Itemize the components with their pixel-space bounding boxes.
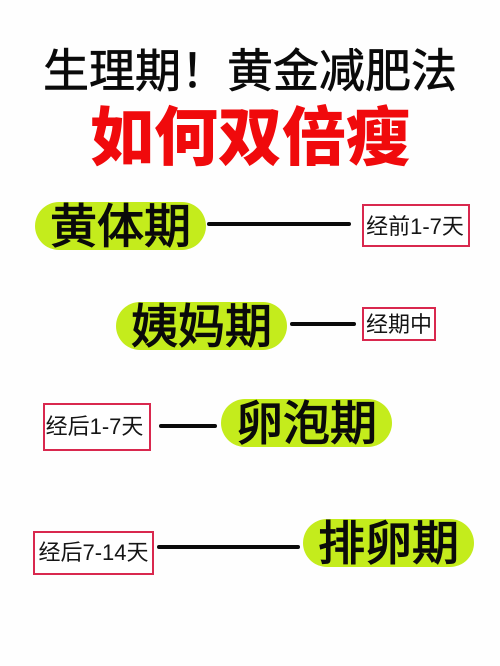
pill: luteal phase: 黄体期 [50,200,191,253]
pill: follicular phase: 卵泡期 [236,397,377,450]
connector: follicular phase [159,424,217,428]
label box: before period [362,204,470,247]
label box: during period [362,307,436,341]
label box: during period: 经期中 [366,312,432,337]
title: red headline: 如何双倍瘦 [90,102,410,174]
label box: after period 1-7 days [43,403,151,451]
connector: menstrual phase [290,322,356,326]
connector: luteal phase [207,222,351,226]
title: line one: 生理期！黄金减肥法 [43,45,457,97]
connector: ovulation phase [157,545,300,549]
pill: ovulation phase: 排卵期 [318,517,459,570]
label box: after period 7-14 days: 经后7-14天 [38,540,149,565]
label box: after period 1-7 days: 经后1-7天 [46,414,143,439]
label box: before period: 经前1-7天 [366,214,464,239]
label box: after period 7-14 days [33,531,154,575]
pill: menstrual phase: 姨妈期 [131,300,272,353]
